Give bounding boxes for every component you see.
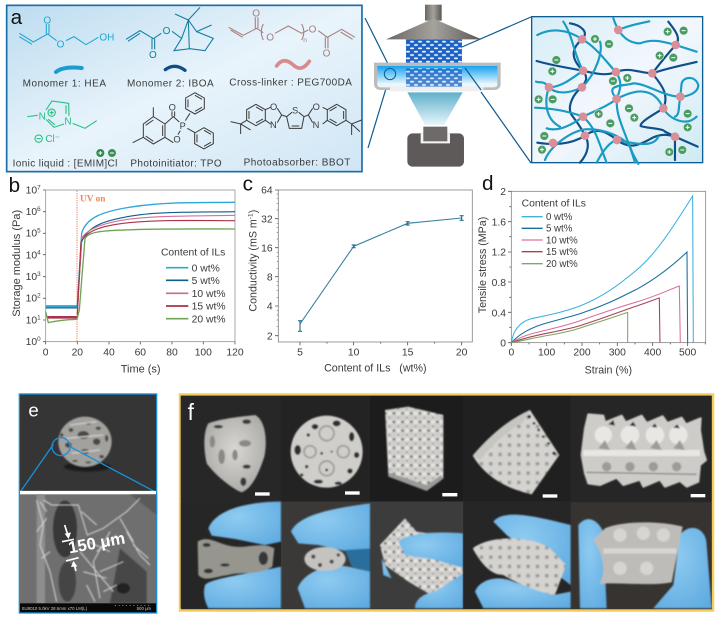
glove and object: pinched sphere	[291, 503, 370, 608]
x tick labels: 200	[573, 347, 591, 358]
y tick labels: 10	[26, 294, 37, 305]
TPO label: Photoinitiator: TPO	[130, 159, 222, 170]
scale bars	[255, 491, 457, 496]
TPO structure: P	[180, 121, 186, 131]
x tick labels: 100	[538, 347, 556, 358]
x tick labels: 20	[72, 347, 83, 358]
y tick labels: 6	[37, 206, 41, 213]
x tick labels: 120	[226, 347, 244, 358]
x tick labels: 400	[644, 347, 662, 358]
photo background cells	[463, 396, 712, 609]
EMIM cation and chloride structure: N	[64, 117, 72, 128]
y tick labels: 10	[26, 250, 37, 261]
x tick labels: 80	[166, 347, 178, 358]
y tick labels: 0	[37, 336, 41, 343]
connector lines from panel a to vat	[365, 18, 388, 148]
PEG700DA structure	[229, 8, 355, 60]
y tick labels: 10	[26, 337, 37, 348]
axis titles: )	[248, 210, 260, 213]
TPO structure: O	[169, 103, 176, 113]
panel e: photo and SEM	[19, 394, 157, 613]
zoom circle and lines	[20, 438, 156, 492]
legend: 5 wt%	[192, 276, 220, 287]
panel c: conductivity chart	[243, 173, 472, 375]
panel letter c: c	[243, 173, 253, 196]
x tick labels: 0	[508, 347, 514, 358]
ion icons	[96, 149, 116, 157]
HEA structure	[19, 15, 114, 51]
BBOT structure: N	[270, 120, 277, 130]
x tick labels: 0	[43, 347, 49, 358]
conductivity line with error bars	[298, 216, 464, 331]
projector	[407, 127, 464, 167]
x tick labels: 15	[402, 347, 414, 358]
y tick labels: 8	[267, 272, 273, 283]
legend: 10 wt%	[192, 289, 226, 300]
panel border	[19, 394, 157, 613]
photo background cells	[181, 396, 463, 609]
IBOA structure	[126, 7, 213, 61]
object: rectangular gyroid	[582, 414, 706, 487]
EMIM label: Ionic liquid : [EMIM]Cl	[13, 159, 117, 170]
glove and object: compressed gyroid	[578, 519, 712, 608]
TPO structure: O	[173, 135, 181, 145]
glove and object: bent lattice	[380, 518, 463, 608]
legend: 15 wt%	[546, 247, 578, 258]
y tick labels: 0	[500, 338, 506, 349]
resin vat	[374, 63, 501, 91]
y tick labels: 32	[261, 214, 273, 225]
HEA structure: O	[43, 15, 51, 26]
axes frame	[508, 191, 706, 346]
SEM image	[20, 494, 157, 613]
y tick labels: 10	[26, 272, 37, 283]
PEG700DA structure: O	[266, 33, 274, 44]
light polymer chains	[535, 18, 698, 164]
printer head	[386, 5, 482, 39]
y tick labels: 16	[261, 243, 273, 254]
crosslink nodes	[545, 26, 685, 147]
object: porous sphere	[291, 416, 363, 488]
axis titles: Content of ILs (wt%)	[324, 363, 427, 375]
y tick labels: 1	[37, 314, 41, 321]
axes frame	[275, 190, 472, 345]
y tick labels: 0.4	[492, 308, 506, 319]
ions	[534, 26, 692, 156]
x tick labels: 10	[348, 347, 360, 358]
glove and object: curved lattice	[473, 515, 571, 608]
IBOA structure: O	[149, 50, 157, 61]
legend: Content of ILs	[522, 199, 586, 210]
BBOT structure: S	[292, 105, 298, 115]
legend: 10 wt%	[546, 235, 578, 246]
object: gyroid blob	[204, 415, 266, 492]
object: lattice block	[385, 407, 443, 491]
y tick labels: 10	[26, 229, 37, 240]
BBOT label: Photoabsorber: BBOT	[244, 157, 350, 168]
y tick labels: 7	[37, 184, 41, 191]
y tick labels: 4	[267, 302, 273, 313]
axis titles: Tensile stress (MPa)	[477, 217, 489, 313]
PEG700DA label: Cross-linker : PEG700DA	[229, 77, 352, 88]
panel letter e: e	[28, 399, 39, 420]
axis titles: Storage modulus (Pa)	[11, 210, 23, 317]
EMIM cation and chloride structure: Cl⁻	[45, 134, 60, 145]
legend	[522, 199, 586, 270]
panel a: material components	[7, 5, 362, 172]
dark polymer chains	[537, 22, 698, 163]
BBOT structure: N	[313, 120, 319, 130]
object: curved cube lattice	[473, 410, 559, 494]
PEG700DA structure: O	[323, 49, 331, 60]
SEM image: 500 μm	[137, 606, 152, 611]
panel d: tensile stress chart	[477, 172, 706, 376]
x tick labels: 40	[103, 347, 115, 358]
IBOA label: Monomer 2: IBOA	[127, 79, 214, 90]
y tick labels: 2	[500, 187, 506, 198]
legend: 5 wt%	[546, 224, 573, 235]
PEG700DA chain icon	[277, 61, 309, 68]
x tick labels	[297, 347, 468, 358]
BBOT structure: O	[313, 102, 320, 112]
BBOT structure	[231, 102, 362, 135]
x tick labels: 100	[195, 347, 212, 358]
legend: 15 wt%	[192, 302, 226, 313]
axis titles	[11, 210, 161, 376]
y tick labels: 64	[261, 185, 273, 196]
y tick labels	[261, 185, 273, 342]
data curves	[46, 202, 235, 323]
UV on marker: UV on	[80, 195, 106, 205]
panel letter f: f	[188, 399, 195, 425]
panel b: storage modulus chart	[9, 174, 244, 376]
y tick labels: 10	[26, 315, 37, 326]
y tick labels: 1.6	[492, 217, 506, 228]
legend: 20 wt%	[192, 314, 226, 325]
axis titles: -1	[248, 213, 255, 219]
panel letter a: a	[11, 6, 23, 29]
y tick labels: 2	[267, 331, 273, 342]
y tick labels: 10	[26, 207, 37, 218]
photo of printed sphere	[19, 394, 157, 491]
y tick labels	[492, 187, 506, 349]
legend	[161, 247, 226, 325]
3D printer schematic	[374, 5, 501, 167]
y tick labels: 0.8	[492, 278, 506, 289]
x tick labels: 20	[456, 347, 468, 358]
x tick labels: 5	[297, 347, 303, 358]
legend: 0 wt%	[192, 263, 220, 274]
panel letter d: d	[482, 172, 493, 195]
HEA chain icon	[56, 67, 82, 72]
y tick labels	[26, 184, 41, 348]
glove and object: pinched blob	[198, 502, 281, 608]
legend: Content of ILs	[161, 247, 225, 258]
EMIM cation and chloride structure	[27, 101, 97, 145]
x tick labels: 300	[609, 347, 626, 358]
SEM image: SU8010 5.0kV 28.6mm x70 LM(L)	[22, 606, 88, 611]
IBOA chain icon	[165, 66, 185, 70]
panel f: printed objects photo grid	[180, 394, 713, 610]
axis titles: Conductivity (mS m	[248, 219, 260, 312]
x tick labels: 500	[679, 347, 697, 358]
HEA structure: O	[57, 40, 65, 51]
PEG700DA structure: O	[309, 25, 317, 36]
y tick labels: 3	[37, 271, 41, 278]
PEG700DA structure: n	[303, 37, 307, 44]
TPO structure	[133, 93, 213, 149]
axis titles	[477, 217, 632, 376]
pore size annotation: 150 μm	[67, 529, 127, 557]
scale bars	[443, 493, 705, 498]
BBOT structure: O	[270, 102, 277, 112]
y tick labels: 5	[37, 228, 41, 235]
IBOA structure: O	[163, 26, 171, 37]
HEA label: Monomer 1: HEA	[23, 79, 106, 90]
EMIM cation and chloride structure: N	[39, 111, 46, 122]
stress-strain curves	[511, 196, 693, 343]
y tick labels: 4	[37, 249, 41, 256]
legend: 20 wt%	[546, 259, 578, 270]
y tick labels: 2	[37, 293, 41, 300]
legend: 0 wt%	[546, 212, 573, 223]
connector lines to network	[462, 17, 531, 163]
HEA structure: OH	[99, 33, 114, 44]
axis titles: Strain (%)	[585, 364, 632, 376]
x tick labels: 60	[135, 347, 146, 358]
printed lattice	[406, 39, 462, 63]
x tick labels	[508, 347, 697, 358]
UV light cone	[407, 92, 463, 125]
pore size annotation	[62, 525, 127, 571]
axes frame	[43, 190, 235, 344]
x tick labels	[43, 347, 244, 358]
axis titles: Time (s)	[121, 364, 161, 376]
network inset	[532, 17, 703, 164]
y tick labels: 1.2	[492, 248, 506, 259]
y tick labels: 10	[26, 185, 37, 196]
PEG700DA structure: O	[252, 8, 260, 19]
panel letter b: b	[9, 174, 20, 197]
axis titles	[248, 210, 427, 375]
